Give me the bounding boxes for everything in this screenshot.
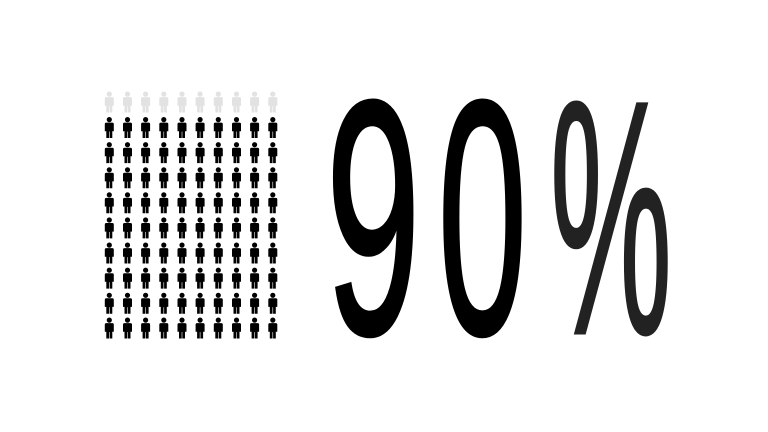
9 rows of black people bbox=[105, 117, 277, 338]
row of 10 light grey people bbox=[105, 92, 277, 112]
percent sign: % bbox=[550, 31, 672, 404]
digit 9: 9 bbox=[326, 33, 420, 405]
pictogram: 100 people, 90 highlighted bbox=[105, 92, 277, 338]
big percentage figure bbox=[326, 31, 672, 405]
digit 0: 0 bbox=[438, 33, 527, 404]
